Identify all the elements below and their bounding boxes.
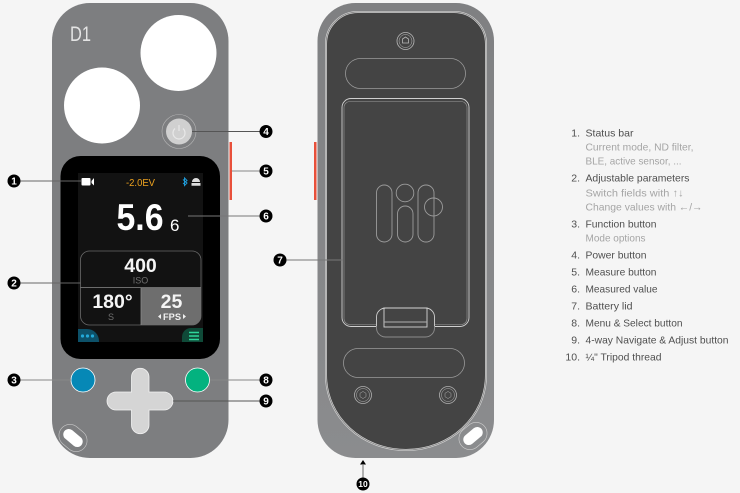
- callout 9: 9: [263, 396, 269, 408]
- logo shape: [376, 184, 442, 242]
- icon: sensor dome: [192, 178, 200, 186]
- callout 10: 10: [358, 479, 368, 489]
- legend item 4: 4.: [571, 250, 580, 262]
- measure button side strip: [230, 142, 232, 200]
- legend item 6: Measured value: [586, 284, 658, 296]
- legend item 1: Current mode, ND filter,: [586, 142, 694, 154]
- legend item 7: Battery lid: [586, 300, 633, 312]
- callout 6: 6: [263, 212, 269, 222]
- callout 7: 7: [277, 256, 283, 266]
- callout 7: [274, 254, 343, 266]
- parameters panel: ISO: [133, 276, 148, 286]
- strap slot: [54, 420, 92, 456]
- legend item 8: 8.: [571, 318, 580, 330]
- legend item 10: ¼" Tripod thread: [586, 352, 662, 364]
- callout 4: 4: [263, 127, 269, 138]
- shutter angle value: 180°: [92, 291, 133, 313]
- display area: [78, 173, 203, 342]
- legend item 2: Adjustable parameters: [586, 172, 690, 184]
- ISO value: 400: [124, 255, 157, 277]
- callout 1: [8, 174, 81, 188]
- function soft key: [78, 329, 99, 342]
- battery lid: [342, 98, 469, 337]
- callout 1: 1: [11, 176, 17, 188]
- legend item 4: Power button: [586, 250, 647, 262]
- bottom screws: [354, 386, 456, 404]
- sensor dome bottom: [64, 68, 140, 144]
- legend item 1: [571, 128, 694, 168]
- exposure value: -2.0EV: [126, 177, 155, 189]
- measured value: 6: [170, 216, 179, 235]
- panel: screen: [60, 156, 220, 359]
- status bar: [82, 177, 200, 189]
- legend item 5: 5.: [571, 266, 580, 278]
- legend item 8: Menu & Select button: [586, 318, 683, 330]
- FPS field highlighted: [141, 288, 201, 325]
- icon: bluetooth: [183, 178, 187, 186]
- legend item 2: 2.: [571, 172, 580, 184]
- legend item 1: 1.: [571, 128, 580, 140]
- icon: power button: [162, 114, 196, 148]
- icon: video camera: [82, 178, 94, 186]
- lower grip recess: [344, 348, 464, 378]
- callout 8: [210, 374, 272, 386]
- panel: device front: [52, 3, 232, 458]
- menu button: [186, 368, 210, 392]
- legend item 10: 10.: [565, 352, 580, 364]
- sensor dome top: [140, 15, 216, 91]
- parameters panel: [80, 251, 201, 325]
- legend item 9: 9.: [571, 334, 580, 346]
- cover inner line: [326, 12, 486, 450]
- legend item 9: 4-way Navigate & Adjust button: [586, 334, 729, 346]
- callout 5: 5: [263, 166, 269, 178]
- FPS value: 25: [161, 291, 182, 313]
- callout 6: [188, 210, 272, 222]
- legend item 3: Function button: [586, 218, 657, 230]
- legend item 1: Status bar: [586, 128, 634, 140]
- legend item 5: Measure button: [586, 266, 657, 278]
- upper grip recess: [346, 58, 466, 88]
- back cover: [326, 12, 486, 450]
- legend item 2: Switch fields with ↑↓: [586, 188, 684, 200]
- function button: [71, 368, 95, 392]
- callout 2: 2: [11, 278, 17, 290]
- legend: [565, 128, 729, 364]
- navigation cross: [107, 368, 173, 434]
- legend item 6: 6.: [571, 284, 580, 296]
- callout 10: [356, 460, 370, 490]
- callout 9: [173, 394, 272, 408]
- legend item 3: 3.: [571, 218, 580, 230]
- model label: D1: [70, 23, 91, 46]
- panel: device back: [314, 3, 494, 458]
- callout 4: [192, 125, 272, 138]
- legend item 3: Mode options: [586, 232, 646, 244]
- measured value: 5.6: [116, 196, 164, 238]
- legend item 3: [571, 218, 657, 244]
- legend item 2: Change values with ←/→: [586, 202, 702, 214]
- parameters panel: FPS: [163, 312, 181, 322]
- device body back: [318, 3, 494, 458]
- measure button side strip: [314, 142, 316, 200]
- parameters panel: S: [108, 312, 114, 322]
- legend item 7: 7.: [571, 300, 580, 312]
- legend item 1: BLE, active sensor, ...: [586, 156, 682, 168]
- callout 3: [8, 374, 71, 386]
- callout 8: 8: [263, 376, 269, 386]
- screen bezel: [60, 156, 220, 359]
- callout 2: [8, 276, 81, 290]
- device body front: [52, 3, 228, 458]
- callout 3: 3: [11, 376, 17, 386]
- top screw: [397, 32, 414, 50]
- strap slot: [454, 418, 492, 454]
- callout 5: [232, 164, 272, 178]
- lid latch: [376, 308, 434, 327]
- legend item 2: [571, 172, 702, 214]
- menu soft key: [182, 328, 203, 342]
